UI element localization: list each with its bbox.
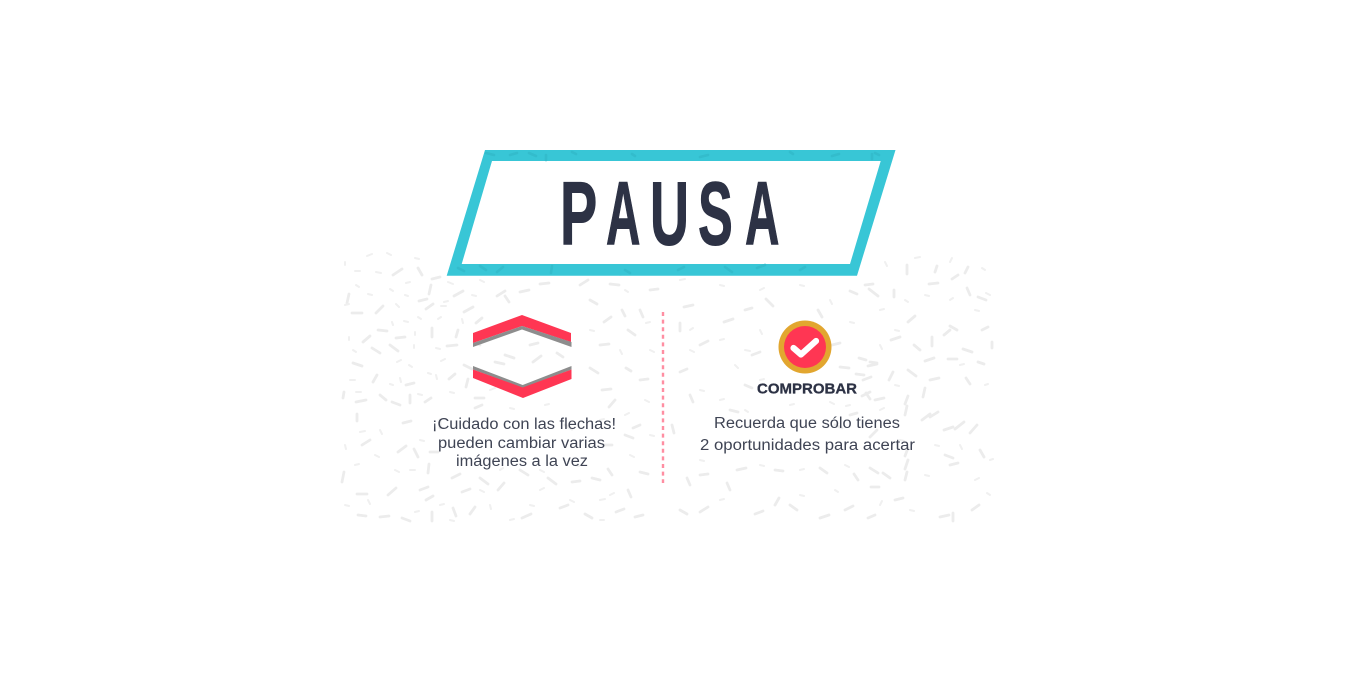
title: PAUSA: A <box>606 165 640 264</box>
title: PAUSA: P <box>560 163 597 264</box>
title: PAUSA: U <box>650 163 689 264</box>
icon: up and down arrows <box>473 315 572 398</box>
text: attempts reminder: 2 oportunidades para acertar <box>700 437 915 454</box>
text: arrows warning: ¡Cuidado con las flechas! <box>432 416 616 433</box>
divider dotted line <box>662 312 664 483</box>
text: arrows warning: pueden cambiar varias <box>438 435 605 452</box>
confetti background pattern <box>342 253 993 521</box>
title: PAUSA: A <box>745 165 779 264</box>
text: attempts reminder <box>700 415 915 454</box>
text: attempts reminder: Recuerda que sólo tienes <box>714 415 900 432</box>
text: arrows warning <box>432 416 616 470</box>
title frame: teal parallelogram <box>447 150 896 276</box>
label: COMPROBAR: COMPROBAR <box>757 382 858 398</box>
text: arrows warning: imágenes a la vez <box>456 453 588 470</box>
title: PAUSA: S <box>698 163 733 264</box>
icon: check badge <box>778 320 832 374</box>
title: PAUSA <box>560 163 779 264</box>
darker confetti on frame <box>458 152 879 273</box>
